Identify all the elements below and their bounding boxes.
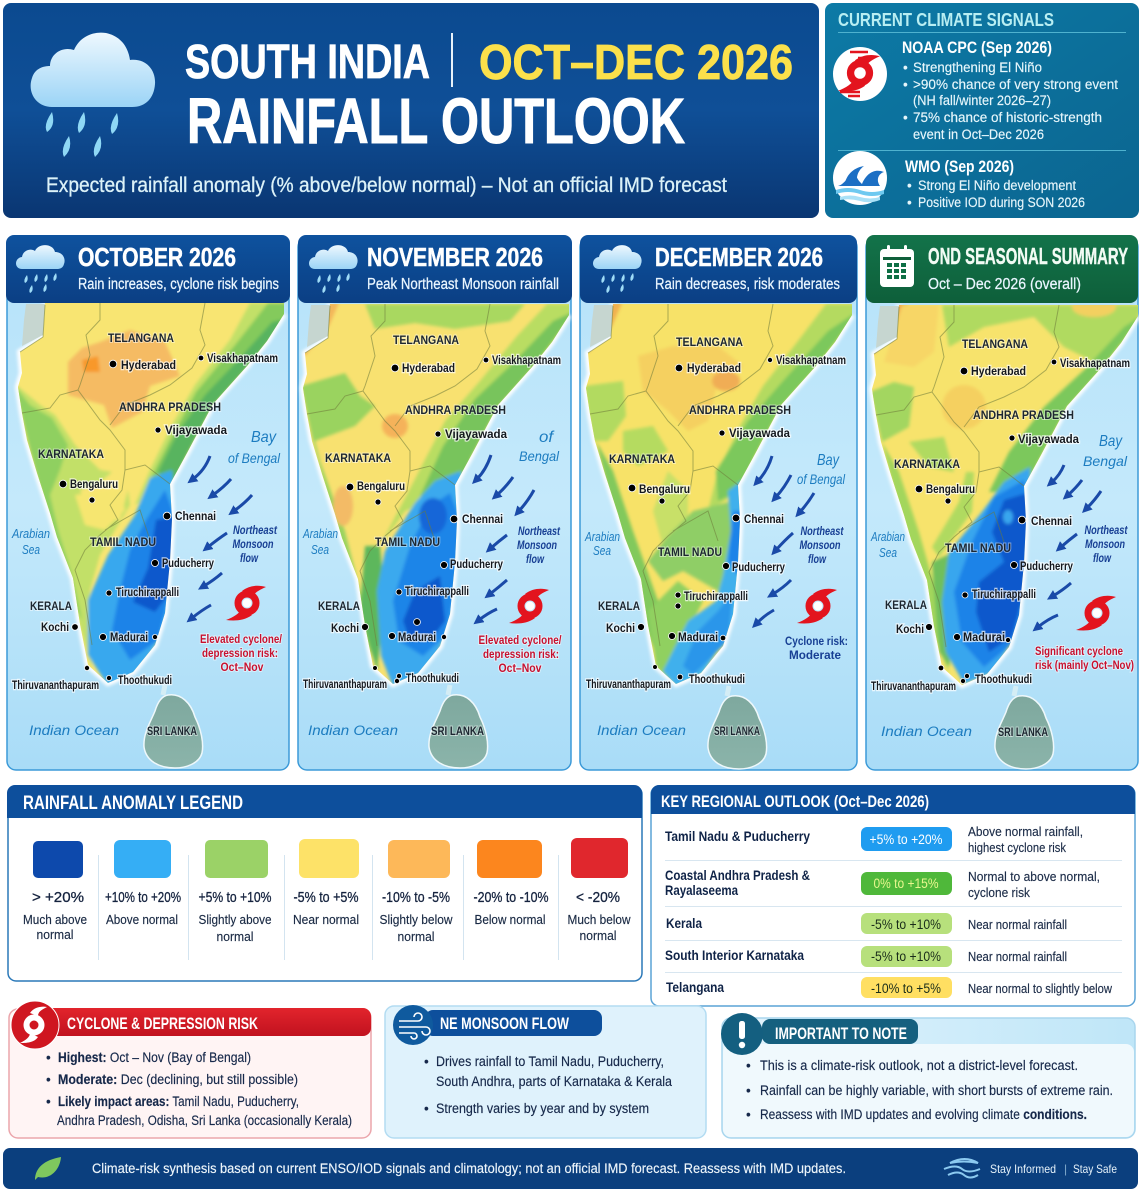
- legend item: above normal: Above normal: [106, 912, 178, 927]
- icon: rain cloud: [593, 245, 642, 293]
- labels: seasonal states and cities: KARNATAKA: [894, 457, 960, 471]
- text: NOAA CPC signals: •: [903, 110, 908, 125]
- labels: seasonal seas: Indian Ocean: [881, 724, 972, 739]
- header: November 2026: NOVEMBER 2026: [367, 242, 543, 272]
- heading: cyclone and depression risk: CYCLONE & DEPRESSION RISK: [67, 1014, 259, 1033]
- text: NE monsoon bullets: Drives rainfall to Tamil Nadu, Puducherry,: [436, 1054, 664, 1069]
- label: northeast monsoon flow: Monsoon: [232, 539, 274, 551]
- icon: WMO waves: [833, 151, 887, 205]
- icon: cyclone: [1076, 596, 1116, 630]
- labels: October seas: Sea: [22, 543, 40, 557]
- labels: October states and cities: Visakhapatnam: [207, 353, 278, 365]
- labels: seasonal states and cities: Thiruvananthapuram: [871, 681, 956, 693]
- labels: seasonal states and cities: [871, 337, 1130, 693]
- icon: waves: [944, 1159, 980, 1178]
- labels: December states and cities: Vijayawada: [729, 428, 791, 440]
- label: northeast monsoon flow: flow: [808, 554, 827, 566]
- icon: rain cloud: [309, 245, 358, 293]
- text: important note bullets: •: [746, 1107, 751, 1122]
- legend item: near normal: -5% to +5%: [294, 889, 358, 906]
- header banner: [3, 3, 819, 218]
- panel: current climate signals: [825, 3, 1139, 218]
- row: South Interior Karnataka: [665, 946, 1067, 967]
- callout: elevated cyclone risk: Oct–Nov: [498, 663, 542, 675]
- label: northeast monsoon flow: Northeast: [233, 525, 278, 537]
- map: Sri Lanka: [995, 686, 1054, 769]
- subtitle: Expected rainfall anomaly (% above/below normal) – Not an official IMD forecast: [46, 174, 727, 197]
- text: cyclone risk bullets: •: [46, 1094, 51, 1109]
- row: South Interior Karnataka: Near normal rainfall: [968, 949, 1067, 964]
- legend item: below normal: -20% to -10%: [474, 889, 548, 906]
- labels: seasonal seas: Arabian: [870, 530, 905, 544]
- label: northeast monsoon flow: [517, 526, 561, 566]
- callout: moderate cyclone risk: Moderate: [789, 648, 841, 662]
- labels: December states and cities: Thiruvananthapuram: [586, 679, 671, 691]
- labels: October states and cities: Puducherry: [162, 558, 214, 570]
- footer bar: [3, 1148, 1138, 1189]
- header: November 2026: [298, 235, 572, 303]
- row: South Interior Karnataka: -5% to +10%: [871, 949, 941, 964]
- callout: moderate cyclone risk: [785, 634, 848, 662]
- labels: October states and cities: Kochi: [41, 622, 69, 634]
- legend item: much below normal: Much below: [568, 912, 631, 927]
- map: Sri Lanka: SRI LANKA: [714, 724, 760, 738]
- labels: seasonal states and cities: TELANGANA: [962, 337, 1028, 351]
- text: stay informed: |: [1064, 1162, 1067, 1176]
- legend item: much below normal: normal: [580, 928, 617, 943]
- label: northeast monsoon flow: [232, 525, 278, 565]
- legend item: much above normal: normal: [36, 927, 74, 942]
- legend item: much below normal: [568, 838, 631, 943]
- heading: important to note: IMPORTANT TO NOTE: [775, 1024, 907, 1043]
- map: Sri Lanka: [708, 686, 767, 769]
- labels: November states and cities: Kochi: [331, 623, 359, 635]
- icon: wind badge: [393, 1005, 433, 1045]
- labels: November states and cities: Chennai: [462, 514, 503, 526]
- labels: December states and cities: Chennai: [744, 514, 784, 526]
- labels: October seas: of Bengal: [228, 450, 281, 466]
- text: cyclone risk bullets: [46, 1050, 352, 1128]
- legend item: much above normal: > +20%: [32, 889, 84, 906]
- callout: significant cyclone risk: [1035, 646, 1134, 672]
- text: disclaimer: Climate-risk synthesis based on current ENSO/IOD signals and climatology; not an official IMD forecast. Reassess with IMD updates.: [92, 1161, 846, 1176]
- label: northeast monsoon flow: flow: [1093, 553, 1112, 565]
- header: October 2026: Rain increases, cyclone risk begins: [78, 276, 279, 293]
- labels: seasonal states and cities: Vijayawada: [1018, 434, 1080, 446]
- labels: November states and cities: Hyderabad: [402, 363, 455, 375]
- labels: seasonal states and cities: Thoothukudi: [975, 674, 1032, 686]
- map: December rainfall anomaly: [582, 303, 856, 689]
- map: Sri Lanka: [144, 685, 203, 768]
- labels: October seas: Arabian: [11, 527, 50, 541]
- row: Coastal Andhra Pradesh and Rayalaseema: Normal to above normal,: [968, 869, 1100, 884]
- callout: elevated cyclone risk: depression risk:: [202, 648, 278, 660]
- legend item: slightly above normal: normal: [216, 929, 254, 944]
- arrows: northeast monsoon flow: [477, 455, 534, 620]
- text: NE monsoon bullets: •: [424, 1101, 429, 1116]
- header: December 2026: [580, 235, 857, 303]
- labels: November states and cities: ANDHRA PRADESH: [405, 403, 506, 417]
- text: important note bullets: This is a climate-risk outlook, not a district-level forecast.: [760, 1058, 1078, 1073]
- labels: seasonal states and cities: Puducherry: [1020, 561, 1073, 573]
- labels: seasonal states and cities: Kochi: [896, 624, 924, 636]
- map: Sri Lanka: SRI LANKA: [147, 724, 197, 738]
- labels: October states and cities: Thiruvananthapuram: [12, 680, 99, 692]
- heading: cyclone and depression risk: [42, 1008, 371, 1036]
- text: stay informed: Stay Informed: [990, 1162, 1056, 1176]
- legend item: slightly above normal: +5% to +10%: [198, 889, 272, 906]
- icon: NOAA hurricane: [833, 47, 887, 101]
- icon: rain cloud: [16, 245, 65, 293]
- labels: December states and cities: Tiruchirappalli: [684, 591, 748, 603]
- text: cyclone risk bullets: Highest: Oct – Nov (Bay of Bengal): [58, 1050, 251, 1065]
- labels: October states and cities: Bengaluru: [70, 479, 118, 491]
- labels: December states and cities: TELANGANA: [676, 335, 743, 349]
- text: NOAA CPC signals: (NH fall/winter 2026–27): [913, 93, 1051, 108]
- labels: December seas: of Bengal: [797, 471, 846, 487]
- labels: November seas: Arabian: [302, 527, 338, 541]
- map: Sri Lanka: SRI LANKA: [998, 725, 1048, 739]
- text: NE monsoon bullets: South Andhra, parts of Karnataka & Kerala: [436, 1074, 672, 1089]
- row: Coastal Andhra Pradesh and Rayalaseema: Rayalaseema: [665, 882, 738, 898]
- row: Coastal Andhra Pradesh and Rayalaseema: [665, 867, 1100, 900]
- text: NOAA CPC signals: NOAA CPC (Sep 2026): [902, 39, 1052, 57]
- labels: October states and cities: KERALA: [30, 599, 72, 613]
- map: seasonal rainfall anomaly: [868, 303, 1139, 690]
- labels: November seas: Sea: [311, 543, 329, 557]
- panel: cyclone and depression risk: [9, 1001, 371, 1138]
- labels: December states and cities: Thoothukudi: [689, 674, 745, 686]
- legend item: near normal: [293, 839, 359, 927]
- labels: October states and cities: ANDHRA PRADESH: [119, 400, 221, 414]
- labels: November states and cities: KERALA: [318, 599, 360, 613]
- callout: moderate cyclone risk: Cyclone risk:: [785, 634, 848, 648]
- text: NOAA CPC signals: >90% chance of very strong event: [913, 77, 1118, 92]
- labels: December states and cities: Bengaluru: [639, 484, 690, 496]
- panel: November 2026: [285, 235, 585, 770]
- labels: December states and cities: Visakhapatnam: [776, 355, 846, 367]
- labels: December seas: Bay: [817, 452, 840, 469]
- text: NOAA CPC signals: [902, 39, 1118, 142]
- text: cyclone risk bullets: Moderate: Dec (declining, but still possible): [58, 1072, 298, 1087]
- labels: seasonal seas: [870, 433, 1128, 739]
- labels: November states and cities: Thiruvananthapuram: [303, 679, 387, 691]
- callout: elevated cyclone risk: Elevated cyclone/: [200, 634, 283, 646]
- labels: October states and cities: Chennai: [175, 511, 216, 523]
- labels: November states and cities: Puducherry: [450, 559, 503, 571]
- labels: seasonal states and cities: Hyderabad: [971, 366, 1026, 378]
- labels: October states and cities: KARNATAKA: [38, 447, 104, 461]
- callout: elevated cyclone risk: [200, 634, 283, 674]
- labels: December states and cities: Hyderabad: [687, 363, 741, 375]
- labels: October states and cities: Madurai: [110, 632, 148, 644]
- labels: November seas: [302, 429, 560, 738]
- legend item: slightly below normal: Slightly below: [380, 912, 453, 927]
- header: December 2026: DECEMBER 2026: [655, 242, 823, 272]
- labels: November states and cities: Tiruchirappalli: [405, 586, 469, 598]
- label: northeast monsoon flow: Northeast: [1084, 525, 1128, 537]
- legend item: much above normal: [23, 841, 87, 942]
- header: November 2026: Peak Northeast Monsoon rainfall: [367, 276, 559, 293]
- labels: December states and cities: ANDHRA PRADESH: [689, 403, 791, 417]
- labels: November seas: Bengal: [519, 448, 560, 464]
- header: OND seasonal summary: [866, 235, 1138, 303]
- legend item: below normal: Below normal: [474, 912, 546, 927]
- labels: November states and cities: Vijayawada: [445, 429, 508, 441]
- text: stay informed: Stay Safe: [1073, 1162, 1117, 1176]
- labels: November states and cities: Bengaluru: [357, 481, 405, 493]
- labels: seasonal states and cities: Chennai: [1031, 516, 1072, 528]
- arrows: northeast monsoon flow: [757, 456, 814, 623]
- legend item: slightly below normal: normal: [398, 929, 435, 944]
- labels: November seas: Indian Ocean: [308, 723, 398, 738]
- legend item: below normal: [474, 840, 548, 927]
- map: Sri Lanka: [429, 685, 488, 768]
- heading: legend: RAINFALL ANOMALY LEGEND: [23, 793, 243, 814]
- labels: November seas: of: [539, 429, 555, 446]
- row: South Interior Karnataka: South Interior Karnataka: [665, 947, 804, 963]
- panel: OND seasonal summary: [854, 235, 1143, 770]
- legend item: above normal: [105, 840, 181, 927]
- text: cyclone risk bullets: •: [46, 1072, 51, 1087]
- icon: large rain cloud: [31, 33, 155, 157]
- icon: cyclone: [797, 589, 837, 623]
- legend item: much below normal: < -20%: [576, 889, 620, 906]
- labels: seasonal seas: Sea: [879, 546, 897, 560]
- row: Telangana: [666, 977, 1113, 998]
- heading: NE monsoon flow: NE MONSOON FLOW: [440, 1014, 570, 1033]
- icon: cyclone: [509, 589, 549, 623]
- panel: October 2026: [0, 235, 300, 770]
- header: December 2026: Rain decreases, risk moderates: [655, 276, 840, 293]
- row: Telangana: Telangana: [666, 979, 724, 995]
- icon: cyclone: [226, 586, 266, 620]
- label: northeast monsoon flow: Northeast: [800, 526, 844, 538]
- labels: October states and cities: [12, 331, 278, 692]
- labels: November states and cities: Thoothukudi: [406, 673, 459, 685]
- row: Tamil Nadu and Puducherry: +5% to +20%: [870, 832, 942, 847]
- text: WMO signals: Positive IOD during SON 2026: [918, 195, 1085, 210]
- label: northeast monsoon flow: Monsoon: [800, 540, 840, 552]
- legend item: slightly below normal: [380, 840, 453, 944]
- header: October 2026: OCTOBER 2026: [78, 242, 236, 272]
- row: Coastal Andhra Pradesh and Rayalaseema: 0% to +15%: [874, 876, 938, 891]
- labels: December states and cities: Puducherry: [732, 562, 785, 574]
- map: November rainfall anomaly: [298, 303, 572, 689]
- text: important note bullets: Rainfall can be highly variable, with short bursts of extreme rain.: [760, 1083, 1113, 1098]
- labels: October states and cities: TELANGANA: [108, 331, 174, 345]
- labels: October states and cities: TAMIL NADU: [90, 535, 156, 549]
- labels: seasonal states and cities: Visakhapatnam: [1060, 358, 1130, 370]
- icon: calendar: [880, 245, 914, 287]
- arrows: northeast monsoon flow: [192, 456, 252, 618]
- legend item: near normal: Near normal: [293, 912, 359, 927]
- labels: seasonal states and cities: TAMIL NADU: [945, 541, 1011, 555]
- row: Tamil Nadu and Puducherry: Above normal rainfall,: [968, 824, 1083, 839]
- callout: significant cyclone risk: Significant cyclone: [1035, 646, 1123, 658]
- legend item: slightly below normal: -10% to -5%: [382, 889, 450, 906]
- legend item: much above normal: Much above: [23, 912, 87, 927]
- labels: seasonal states and cities: Bengaluru: [926, 484, 975, 496]
- map: October rainfall anomaly: [14, 303, 288, 688]
- labels: December seas: Sea: [593, 544, 611, 558]
- legend item: slightly above normal: Slightly above: [198, 912, 272, 927]
- label: northeast monsoon flow: [800, 526, 844, 566]
- labels: December states and cities: KARNATAKA: [609, 452, 675, 466]
- labels: seasonal states and cities: ANDHRA PRADESH: [973, 408, 1074, 422]
- title: Rainfall Outlook: RAINFALL OUTLOOK: [187, 85, 685, 157]
- labels: October states and cities: Tiruchirappalli: [116, 587, 179, 599]
- text: NOAA CPC signals: Strengthening El Niño: [913, 60, 1042, 75]
- heading: important to note: [762, 1019, 918, 1044]
- heading: NE monsoon flow: [425, 1010, 602, 1036]
- callout: elevated cyclone risk: [478, 635, 562, 675]
- arrows: northeast monsoon flow: [1038, 465, 1101, 627]
- text: NE monsoon bullets: •: [424, 1054, 429, 1069]
- row: Tamil Nadu and Puducherry: [665, 824, 1083, 855]
- heading: key regional outlook: KEY REGIONAL OUTLOOK (Oct–Dec 2026): [661, 792, 929, 811]
- text: NOAA CPC signals: •: [903, 60, 908, 75]
- text: cyclone risk bullets: •: [46, 1050, 51, 1065]
- callout: elevated cyclone risk: Elevated cyclone/: [478, 635, 562, 647]
- text: WMO signals: •: [907, 178, 912, 193]
- text: important note bullets: •: [746, 1083, 751, 1098]
- labels: November states and cities: TAMIL NADU: [375, 535, 440, 549]
- row: Kerala: -5% to +10%: [871, 917, 941, 932]
- text: WMO signals: [905, 158, 1085, 210]
- text: NE monsoon bullets: [424, 1054, 672, 1116]
- labels: December seas: Indian Ocean: [597, 723, 686, 738]
- panel: rainfall anomaly legend: [7, 785, 642, 981]
- labels: seasonal states and cities: Madurai: [963, 632, 1005, 644]
- row: Telangana: Near normal to slightly below: [968, 981, 1113, 996]
- text: NE monsoon bullets: Strength varies by year and by system: [436, 1101, 649, 1116]
- legend item: slightly above normal: [198, 840, 272, 944]
- labels: December states and cities: Madurai: [678, 632, 718, 644]
- labels: November states and cities: TELANGANA: [393, 333, 459, 347]
- text: important note bullets: Reassess with IMD updates and evolving climate conditions.: [760, 1107, 1087, 1122]
- panel: NE monsoon flow: [385, 1005, 706, 1138]
- text: WMO signals: Strong El Niño development: [918, 178, 1076, 193]
- row: Kerala: Near normal rainfall: [968, 917, 1067, 932]
- labels: December states and cities: [586, 335, 846, 691]
- labels: October seas: Indian Ocean: [29, 723, 119, 738]
- row: Coastal Andhra Pradesh and Rayalaseema: cyclone risk: [968, 885, 1030, 900]
- callout: elevated cyclone risk: depression risk:: [483, 649, 559, 661]
- labels: December seas: Arabian: [584, 530, 620, 544]
- labels: November states and cities: KARNATAKA: [325, 451, 391, 465]
- text: cyclone risk bullets: Likely impact areas: Tamil Nadu, Puducherry,: [58, 1094, 299, 1109]
- text: NOAA CPC signals: event in Oct–Dec 2026: [913, 127, 1044, 142]
- text: NOAA CPC signals: •: [903, 77, 908, 92]
- labels: seasonal seas: Bay: [1099, 433, 1123, 450]
- row: Tamil Nadu and Puducherry: highest cyclone risk: [968, 840, 1066, 855]
- callout: elevated cyclone risk: Oct–Nov: [220, 662, 264, 674]
- text: important note bullets: •: [746, 1058, 751, 1073]
- row: Telangana: -10% to +5%: [871, 981, 941, 996]
- row: Coastal Andhra Pradesh and Rayalaseema: Coastal Andhra Pradesh &: [665, 867, 810, 883]
- row: Kerala: [666, 913, 1067, 934]
- title: South India: SOUTH INDIA: [185, 36, 430, 89]
- panel: December 2026: [568, 235, 868, 770]
- label: northeast monsoon flow: flow: [526, 554, 545, 566]
- panel: key regional outlook: [651, 785, 1135, 1006]
- row: Tamil Nadu and Puducherry: Tamil Nadu & Puducherry: [665, 828, 810, 844]
- text: WMO signals: WMO (Sep 2026): [905, 158, 1014, 176]
- labels: December states and cities: Kochi: [606, 623, 635, 635]
- label: northeast monsoon flow: [1084, 525, 1128, 565]
- label: northeast monsoon flow: Monsoon: [1085, 539, 1125, 551]
- heading: current climate signals: CURRENT CLIMATE SIGNALS: [838, 10, 1054, 30]
- icon: exclamation badge: [721, 1013, 763, 1055]
- labels: December states and cities: TAMIL NADU: [658, 545, 722, 559]
- labels: October states and cities: Thoothukudi: [118, 675, 172, 687]
- labels: seasonal seas: Bengal: [1083, 453, 1128, 469]
- label: northeast monsoon flow: Monsoon: [517, 540, 557, 552]
- row: Kerala: Kerala: [666, 915, 702, 931]
- labels: October seas: [11, 429, 281, 738]
- label: northeast monsoon flow: Northeast: [518, 526, 561, 538]
- header: OND seasonal summary: Oct – Dec 2026 (overall): [928, 276, 1081, 293]
- text: stay informed: [990, 1162, 1117, 1176]
- label: northeast monsoon flow: flow: [240, 553, 259, 565]
- labels: seasonal states and cities: KERALA: [885, 598, 927, 612]
- icon: cyclone badge: [11, 1001, 59, 1049]
- labels: November states and cities: Visakhapatnam: [492, 355, 561, 367]
- title: Oct-Dec 2026: OCT–DEC 2026: [479, 36, 793, 90]
- text: NOAA CPC signals: 75% chance of historic-strength: [913, 110, 1102, 125]
- labels: November states and cities: [303, 333, 561, 691]
- labels: December states and cities: KERALA: [598, 599, 640, 613]
- legend item: above normal: +10% to +20%: [105, 889, 181, 906]
- labels: seasonal states and cities: Tiruchirappalli: [972, 589, 1036, 601]
- icon: leaf: [35, 1157, 61, 1180]
- labels: October seas: Bay: [251, 429, 277, 446]
- labels: December seas: [584, 452, 846, 738]
- text: cyclone risk bullets: Andhra Pradesh, Odisha, Sri Lanka (occasionally Kerala): [57, 1113, 352, 1128]
- labels: October states and cities: Hyderabad: [121, 360, 176, 372]
- labels: November states and cities: Madurai: [398, 632, 436, 644]
- map: Sri Lanka: SRI LANKA: [431, 724, 484, 738]
- text: important note bullets: [746, 1058, 1113, 1122]
- text: WMO signals: •: [907, 195, 912, 210]
- panel: important to note: [721, 1013, 1135, 1138]
- labels: October states and cities: Vijayawada: [165, 425, 228, 437]
- header: October 2026: [6, 235, 290, 303]
